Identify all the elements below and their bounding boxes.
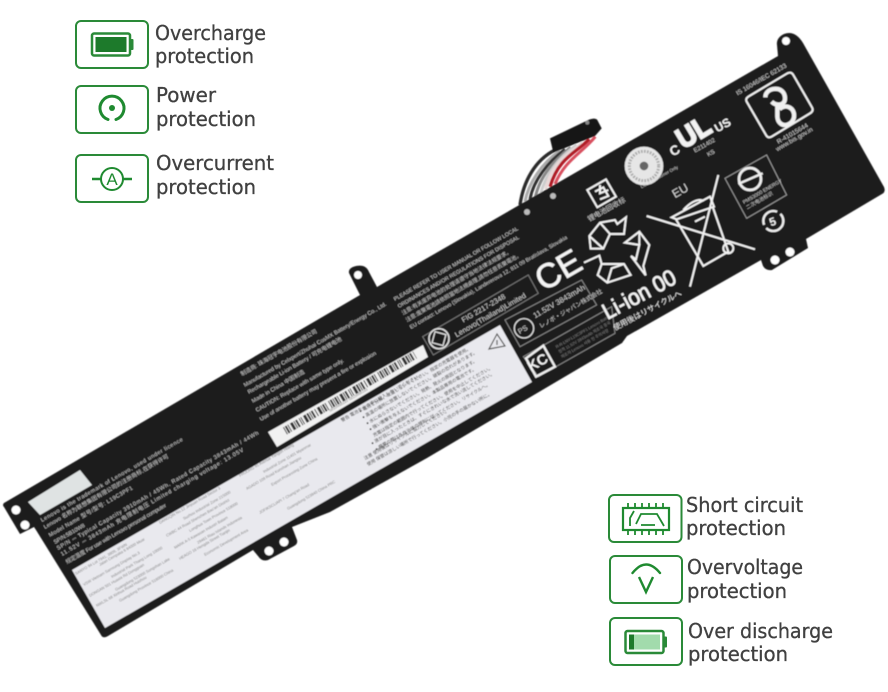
icon: circuit chip xyxy=(623,503,669,535)
icon: number 5 cycle xyxy=(763,211,783,231)
label xyxy=(156,83,256,131)
left column text: SANYO 94 Lot 7941, 3909, 3FWN xyxy=(74,542,128,576)
label xyxy=(688,619,833,666)
right column text: Guangdong 523840 China PRC xyxy=(286,479,336,511)
mounting holes xyxy=(12,37,794,556)
icon: ammeter: A xyxy=(106,170,118,189)
spec text block: 规定温度 For use with Lenovo personal computer xyxy=(64,501,168,566)
safety notice text: ● 電池を分解、改造しないでください。指定の充電器を使用。 xyxy=(358,345,472,415)
KC box xyxy=(523,307,615,377)
panel: over discharge protection xyxy=(610,618,833,666)
spec text block: 11.52V ⎓ 3843mAh 充电限制电压 Limited charging voltage: 13.05V xyxy=(59,446,245,558)
safety notice text: ● 水にぬらさないでください。発熱、発火の原因となります。 xyxy=(364,357,478,427)
label: Short circuit xyxy=(686,493,803,517)
safety notice text: ● 強い衝撃を与えないでください。本製品専用の電池です。 xyxy=(368,365,477,433)
label: Over discharge xyxy=(688,619,833,643)
left column text: Industrial Park Thang Long 10000 xyxy=(110,545,164,579)
spec text block: SP/N:5B10W8 xyxy=(53,523,86,546)
icon: crossed-out bin xyxy=(647,175,755,287)
right column text: Export Processing Zone China xyxy=(270,456,319,487)
spec text block: Lenovo 名称为联想集团有限公司的注册商标,在获得许可 xyxy=(42,452,170,531)
panel: overcurrent protection xyxy=(76,151,274,202)
middle column text: Economic Development Area xyxy=(203,527,250,557)
left column text: Jalan Cempaka 6 84000 Muar xyxy=(98,536,146,567)
spec text block: SP/N ⎓ Typical Capacity 3910mAh / 45Wh, Rated Capacity 3843mAh / 44Wh xyxy=(56,431,260,552)
middle column text: Longhua Town Province 518000 xyxy=(188,500,239,533)
manufacturer text block: Rechargeable Li-ion Battery / 可充电锂电池 xyxy=(246,335,344,396)
spec text block: Model Name 型号/型号: L19C3PF1 xyxy=(47,484,134,539)
KC box: R-R-LNV-L19C3PF1 Lenovo Battery xyxy=(555,313,613,349)
manufacturer text block: CAUTION: Replace with same type only. xyxy=(255,358,346,414)
safety notice text: ● 液が目に入ったときは、すぐにきれいな水で洗い流してください。 xyxy=(370,370,496,447)
right column text: JOFIKSCLIAPI 7 Chang'an Road xyxy=(258,482,310,515)
rating box xyxy=(505,280,604,347)
panel: overvoltage protection xyxy=(610,555,803,603)
panel: power protection xyxy=(76,83,256,133)
UL mark: KS xyxy=(706,149,716,158)
left column text: VSW Vietnam Samsung Display No.3 xyxy=(82,550,141,587)
safety label on battery xyxy=(72,325,532,628)
middle column text: DANGQIN No.12 Jinyuan Road Sector 3 xyxy=(158,485,221,525)
right column text: FRUORG 45 Avenue Yangon Hlaing xyxy=(238,442,295,478)
label: protection xyxy=(156,107,256,131)
middle column text: MARK A-5 Kawasan Industri Batam xyxy=(173,515,229,550)
KC box: 제조자 Lenovo 사용 전 주의사항 xyxy=(559,327,610,359)
right column text: AGADO 109 Road Kunshan Jiangsu xyxy=(245,455,302,491)
label: Overvoltage xyxy=(687,555,803,579)
middle column text: CWBC 44 Road Shenzhen Bao'an District xyxy=(165,497,231,538)
manufacturer text block: Manufactured by Celxpert/Zhuhai CosMX Battery/Energy Co., Ltd. xyxy=(243,301,388,389)
label: Overcharge xyxy=(155,21,266,45)
panel: overcharge protection xyxy=(76,21,266,68)
white blank label xyxy=(28,470,92,515)
KC box: KC xyxy=(525,351,552,375)
barcode label: 5B10W86193 SB10W86193 xyxy=(328,387,368,413)
label: protection xyxy=(688,642,788,666)
left column text xyxy=(74,536,175,608)
rating box: レノボ・ジャパン株式会社 xyxy=(538,287,604,330)
certificate box: FIG: FIG 2217-2348 xyxy=(460,292,507,324)
manufacturer text block: 制造商: 珠海冠宇电池股份有限公司 xyxy=(239,327,318,378)
icon: number 5 cycle: 5 xyxy=(768,216,778,229)
CE mark: CE xyxy=(529,242,588,299)
icon: voltage arc xyxy=(632,564,660,592)
BIS badge xyxy=(735,62,815,154)
text: recycle note: 使用後はリサイクルへ xyxy=(611,288,683,332)
rating box: PS xyxy=(516,323,529,336)
icon: battery recycle square: 锂电池回收标 xyxy=(586,195,627,223)
warning triangle xyxy=(489,334,505,349)
icon: recycling seal: LIB & Consumer Only xyxy=(640,164,679,189)
UL mark: UL xyxy=(670,110,717,155)
icon: battery recycle square xyxy=(586,179,627,223)
rating box: 11.52V 3843mAh xyxy=(531,283,587,320)
disposal notice text: 注意:废棄電池請依照當地法規處理,請勿任意丟棄電池。 xyxy=(404,251,523,324)
label: protection xyxy=(687,579,787,603)
energy mark box: PMS3000 ENERGY xyxy=(742,178,784,206)
icon: power dial xyxy=(100,96,124,120)
safety notice text: 充電は指定の範囲内で行ってください。使用を中止してください。 xyxy=(372,364,494,439)
disposal notice text: EU contact: Lenovo (Slovakia), Landererova 12, 811 09 Bratislava, Slovakia xyxy=(409,235,569,331)
spec text block: Lenovo is the trademark of Lenovo, used under licence xyxy=(40,437,184,524)
manufacturer text block xyxy=(239,301,388,423)
middle column text: Suzhou Industrial Zone 215000 xyxy=(182,489,232,521)
middle column text: 29461 Riau Islands Indonesia xyxy=(196,514,244,545)
panel: short circuit protection xyxy=(609,493,803,542)
left column text: Guangdong 523000 Songshan Lake xyxy=(114,556,171,592)
KC box: 정격 11.52V 3843mAh 제조국 중국 xyxy=(557,319,612,354)
barcode label xyxy=(268,345,428,447)
disposal notice text: ORDINANCES AND/OR REGULATIONS FOR DISPOSAL xyxy=(397,235,521,310)
label xyxy=(687,555,803,603)
text: Li-ion 00: Li-ion 00 xyxy=(597,264,680,324)
left column text: DONGAN 501 Huaxia Rd Dongguan xyxy=(88,562,145,598)
UL mark: C xyxy=(667,141,683,159)
icon: full battery xyxy=(92,34,134,56)
middle column text: HEAGO 16 Hengda Street Tianjin xyxy=(178,528,231,561)
disposal notice text: 注意:有关废弃电池的处理请遵守当地法律法规要求。 xyxy=(400,247,513,317)
label: Overcurrent xyxy=(156,151,274,175)
label xyxy=(156,151,274,199)
middle column text xyxy=(158,485,250,561)
text: EU: EU xyxy=(669,180,691,201)
UL mark: US xyxy=(712,115,733,135)
manufacturer text block: Made in China 中国制造 xyxy=(250,368,306,405)
certificate box: FIG: Lenovo(Thailand)Limited xyxy=(453,291,527,339)
energy mark box: 二次电池标识 xyxy=(745,190,774,211)
marks drawn in battery space xyxy=(505,110,787,377)
BIS badge: R-41015644 xyxy=(776,122,810,146)
UL mark: E211402 xyxy=(693,137,717,154)
UL mark xyxy=(667,110,733,159)
label: protection xyxy=(155,44,254,68)
icon: low battery xyxy=(626,631,667,653)
label: protection xyxy=(156,175,256,199)
manufacturer text block: Use of another battery may present a fire or explosion xyxy=(259,351,378,423)
safety notice text: 注意 使用後はリサイクルに協力してください。 xyxy=(362,407,450,462)
safety notice text: ● 高温の場所に放置しないでください。破裂の恐れがあります。 xyxy=(360,349,478,421)
safety notice text xyxy=(340,345,496,468)
left column text: Guangdong Province 516000 China xyxy=(118,567,175,603)
energy mark box xyxy=(725,155,787,218)
battery wires and connector xyxy=(520,119,602,205)
safety notice text: 警告 電池を火の中に投入しないでください。 xyxy=(340,371,424,424)
BIS badge: IS 16046/IEC 62133 xyxy=(735,62,788,97)
right column text: Industrial Zone 11401 Myanmar xyxy=(262,442,312,474)
disposal notice text: PLEASE REFER TO USER MANUAL OR FOLLOW LOCAL xyxy=(393,226,520,303)
right column text xyxy=(238,442,336,515)
icon: recycling seal xyxy=(625,147,679,189)
safety notice text: ● 廃棄の際は各自治体の規則に従ってください。リサイクルへ。 xyxy=(374,381,491,453)
BIS badge: www.bis.gov.in xyxy=(774,126,815,154)
label xyxy=(686,493,803,540)
icon: recycling arrows xyxy=(584,217,649,283)
icon: ammeter xyxy=(92,168,132,190)
label: protection xyxy=(686,516,786,540)
label: Power xyxy=(156,83,217,107)
left column text: NWLSL 68 Xinhua Road Huizhou xyxy=(95,575,147,608)
label xyxy=(155,21,266,68)
safety notice text: 使用 保管は涼しい場所で行ってください。小児の手の届かない所に。 xyxy=(366,390,493,468)
certificate box: FIG xyxy=(423,275,538,355)
